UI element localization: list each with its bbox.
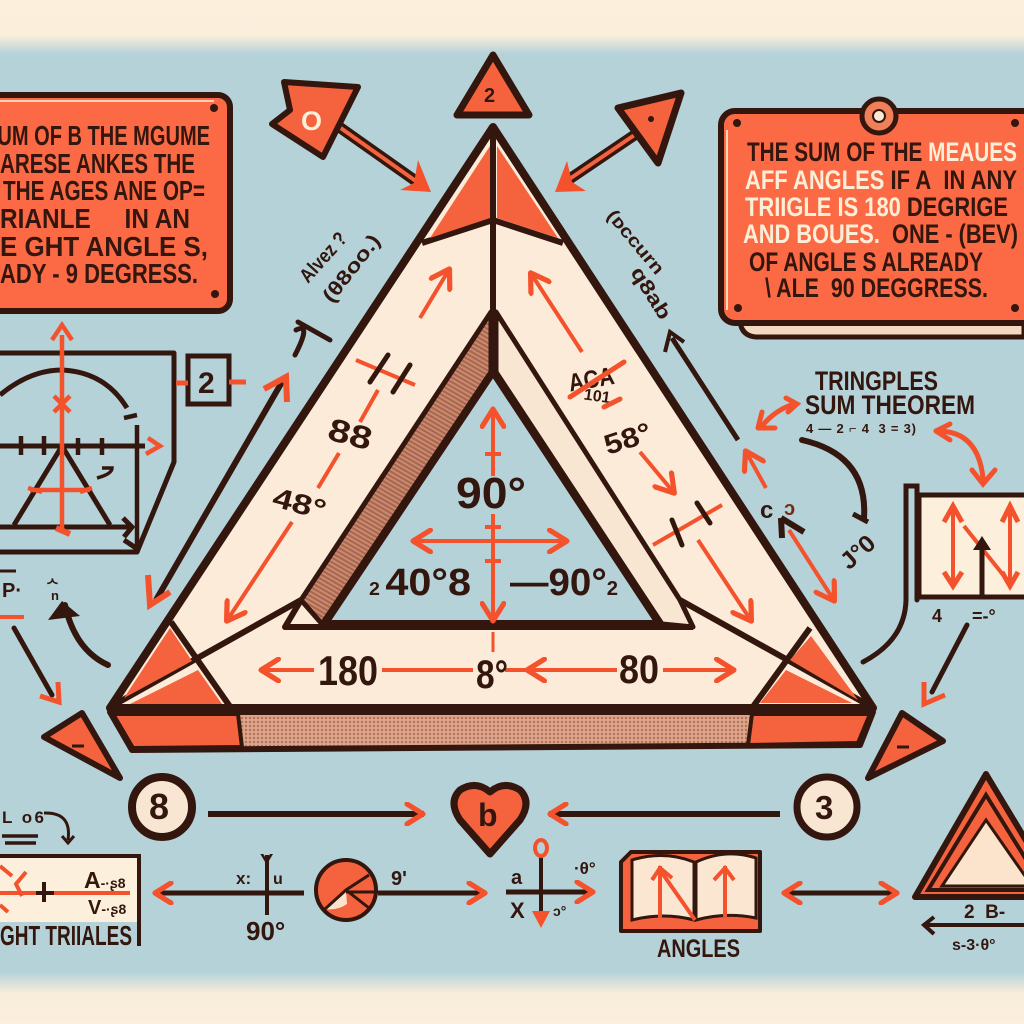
base labels: 180 [318,647,378,694]
arrow: flag to right triangle [924,625,967,704]
label: inner right angle: —90°2 [510,562,618,604]
arrows around theorem title [758,398,995,484]
main triangle diagram: 101 [583,387,612,407]
panel: left explanation note: ARESE ANKES THE [0,148,195,179]
centre ridge [490,130,496,312]
panel: right explanation note [721,99,1024,337]
label: inner left angle: 2 40°8 [369,562,471,604]
chart: small xy axis: a [511,867,523,889]
left corner wedges [124,628,222,704]
annotation: right diagonal dimension arrow: (ᴅccurn [603,206,668,278]
panel: flag chart: =-° [972,606,996,626]
panel: right triangles card: GHT TRIIALES [0,920,132,951]
icon: pin [862,99,896,133]
annotation: left diagonal dimension arrow: (θ8ᴏo.) [319,230,385,307]
annotation: right diagonal dimension arrow: ɔ [784,498,795,520]
label: triangle sum theorem: SUM THEOREM [805,390,975,420]
icon: circle number 8 [132,777,192,837]
annotation: left diagonal dimension arrow [148,228,385,605]
icon: circle number 3 [797,777,857,837]
chart: small xy axis: X [510,898,525,923]
apex corner wedges [430,146,558,238]
panel: right triangles card: A-·ʂ8 [84,867,126,893]
annotation: lower-left labels and arrows: P· [2,580,22,602]
chart: 90 degree axis with pie: Y [260,851,274,873]
icon: boxed number 2: 2 [198,367,215,400]
label: angles: ANGLES [657,935,740,963]
icon: lower-left triangle [44,713,120,778]
chart: 90 degree axis with pie: x: [236,869,251,888]
bottom paper band [0,972,1024,1024]
chart: 90 degree axis with pie [154,851,486,946]
icon: top-left triangle pointer with arrow: O [301,106,322,136]
panel: left explanation note: ADY - 9 DEGRESS. [0,258,198,289]
inner cross arrows [491,408,495,622]
triangle body [110,127,873,708]
main triangle diagram [110,127,873,750]
panel: flag chart [863,486,1024,662]
chart: 90 degree axis with pie: u [273,871,283,888]
annotation: lower-left labels and arrows [0,571,108,702]
label: triangle sum theorem: 4 — 2 ⌐ 4 3 = 3) [806,421,916,436]
label: triangle sum theorem [805,366,975,436]
main triangle diagram: 8° [476,653,508,697]
annotation: lower-left labels and arrows: n [51,588,59,603]
annotation: right diagonal dimension arrow: c [760,497,773,524]
side arrows [420,268,450,318]
icon: bottom-right nested triangle [915,774,1024,897]
tick marks [356,360,722,545]
label: 90 degrees: 90° [456,469,526,518]
icon: heart [454,785,526,854]
right corner wedges [760,636,858,703]
chart: bottom-right axis: 2 B- [964,902,1005,923]
icon: boxed number 2 [176,356,246,404]
pie chart [316,860,378,920]
annotation: right diagonal dimension arrow [603,206,835,602]
chart: small xy axis: ·θ° [574,859,596,878]
chart: bottom-right axis: s-3·θ° [952,937,996,954]
annotation: lower-left labels and arrows: ᄉ [46,577,59,593]
panel: left semicircle diagram [0,325,174,552]
panel: left explanation note: THE AGES ANE OP= [3,175,205,206]
centre tick below inner triangle [492,632,494,652]
annotation: left diagonal dimension arrow: Alvez ? [295,228,352,287]
annotation: right diagonal dimension arrow: q8ab [626,263,675,324]
panel: right triangles card [0,808,139,951]
curved arrow to J30 [802,440,881,575]
panel: flag chart: 4 [932,606,942,626]
panel: left explanation note [0,95,230,311]
inner ledge [285,600,693,627]
left inner bevel [301,312,491,624]
icon: open book [621,852,760,931]
label: triangle sum theorem: TRINGPLES [815,366,938,396]
main triangle diagram: ACA [566,362,616,398]
panel: right triangles card: L o6 [2,808,44,827]
icon: circle number 3: 3 [815,789,833,826]
arrow: circle 3 to heart [549,811,780,817]
arrow: book to triangle [783,890,898,896]
icon: circle number 8: 8 [149,786,169,827]
panel: right triangles card: V-·ʂ8 [88,897,126,919]
main triangle diagram: 58° [600,416,655,461]
bottom bevel [110,712,873,750]
curved arrow to J30: J°0 [835,530,881,575]
arrow: 8 to heart [208,811,424,817]
chart: 90 degree axis with pie: 9' [391,868,407,890]
inner opening [326,373,658,623]
icon: lower-right triangle [868,713,943,778]
icon: top-left triangle pointer with arrow [272,82,431,192]
icon: top-right triangle pointer with arrow [555,93,681,192]
panel: left explanation note: RIANLE IN AN [0,203,190,234]
main triangle diagram: 80 [619,648,659,692]
base arrows [260,668,314,672]
icon: heart: b [478,797,498,833]
chart: small xy axis [506,840,596,928]
chart: small xy axis: ɔ° [553,903,566,919]
top paper band [0,0,1024,54]
main triangle diagram: 48° [269,482,330,526]
chart: bottom-right axis [924,902,1024,954]
icon: top centre triangle: 2 [484,85,495,107]
corner seams [112,220,870,708]
right inner bevel [496,312,693,627]
panel: left explanation note: E GHT ANGLE S, [0,231,208,262]
icon: top centre triangle [457,55,529,115]
side labels: 88 [324,411,376,457]
chart: 90 degree axis with pie: 90° [246,916,285,946]
